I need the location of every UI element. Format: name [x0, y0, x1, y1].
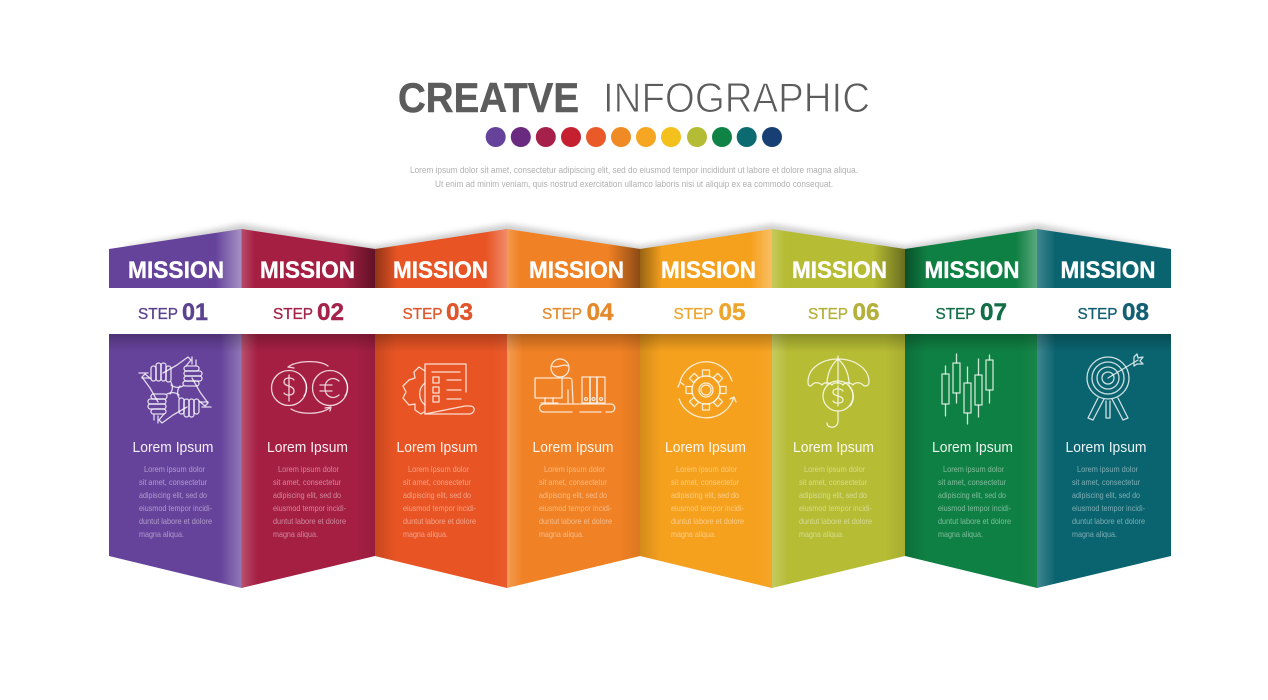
header band 8: MISSION [1060, 257, 1156, 284]
step label 1: STEP [138, 306, 178, 323]
panel: step 7 [905, 229, 1037, 588]
body text 1: eiusmod tempor incidi- [139, 503, 212, 513]
body text 8: magna aliqua. [1072, 529, 1117, 539]
body text 5: Lorem ipsum dolor [676, 464, 737, 474]
step label 8: 08 [1122, 299, 1149, 326]
body text 7: Lorem ipsum dolor [943, 464, 1004, 474]
step label 1 [138, 299, 208, 326]
icon: target with arrow on tripod [1087, 354, 1143, 420]
header band 3: MISSION [393, 257, 488, 284]
panel: step 4 [507, 229, 640, 588]
body panel 5 [640, 334, 772, 588]
step label 2: 02 [317, 299, 344, 326]
body panel 4 [507, 334, 640, 588]
title [398, 74, 870, 121]
body text 8: duntut labore et dolore [1072, 516, 1145, 526]
header band 4 [507, 229, 640, 288]
step label 3: STEP [402, 306, 442, 323]
body text 5 [671, 464, 744, 539]
heading 6: Lorem Ipsum [793, 440, 874, 456]
heading 4: Lorem Ipsum [532, 440, 614, 456]
body text 7: magna aliqua. [938, 529, 983, 539]
body text 2: magna aliqua. [273, 529, 318, 539]
step label 8: STEP [1078, 306, 1118, 323]
step label 2 [273, 299, 344, 326]
body text 8: sit amet, consectetur [1072, 477, 1140, 487]
step label 7: STEP [936, 306, 976, 323]
icon: candlestick chart [942, 354, 993, 424]
header band 3 [375, 229, 507, 288]
body text 8 [1072, 464, 1145, 539]
colour dots row [486, 127, 782, 147]
step label 6 [808, 299, 880, 326]
body text 5: sit amet, consectetur [671, 477, 739, 487]
body panel 8 [1037, 334, 1171, 588]
body text 4: sit amet, consectetur [539, 477, 607, 487]
body text 4: duntut labore et dolore [539, 516, 612, 526]
body text 6: sit amet, consectetur [799, 477, 867, 487]
body text 3: Lorem ipsum dolor [408, 464, 469, 474]
header band 5 [640, 229, 772, 288]
body text 1: magna aliqua. [139, 529, 184, 539]
step label 5: 05 [718, 299, 746, 326]
body text 5: eiusmod tempor incidi- [671, 503, 744, 513]
panel: step 2 [242, 229, 375, 588]
heading 2: Lorem Ipsum [267, 440, 348, 456]
body text 7: eiusmod tempor incidi- [938, 503, 1011, 513]
body text 5: adipiscing elit, sed do [671, 490, 739, 500]
step label 6: STEP [808, 306, 848, 323]
header band 6 [772, 229, 905, 288]
header band 5: MISSION [661, 257, 756, 284]
body text 3: adipiscing elit, sed do [403, 490, 471, 500]
body text 5: magna aliqua. [671, 529, 716, 539]
body text 1: adipiscing elit, sed do [139, 490, 207, 500]
title: INFOGRAPHIC [603, 74, 870, 121]
header band 4: MISSION [529, 257, 624, 284]
step label 4: 04 [586, 299, 614, 326]
body panel 1 [109, 334, 242, 588]
body text 6 [799, 464, 872, 539]
body text 4 [539, 464, 612, 539]
body text 3: magna aliqua. [403, 529, 448, 539]
step label 5 [674, 299, 746, 326]
body text 8: adipiscing elit, sed do [1072, 490, 1140, 500]
header band 6: MISSION [792, 257, 887, 284]
body text 3: eiusmod tempor incidi- [403, 503, 476, 513]
body text 5: duntut labore et dolore [671, 516, 744, 526]
icon: joined hands [139, 357, 211, 423]
body text 2: Lorem ipsum dolor [278, 464, 339, 474]
subtitle text [410, 165, 858, 190]
body text 7: sit amet, consectetur [938, 477, 1006, 487]
body panel 6 [772, 334, 905, 588]
body text 4: eiusmod tempor incidi- [539, 503, 612, 513]
header band 7: MISSION [924, 257, 1020, 284]
header band 1: MISSION [128, 257, 224, 284]
body text 4: adipiscing elit, sed do [539, 490, 607, 500]
body text 6: magna aliqua. [799, 529, 844, 539]
panel: step 8 [1037, 229, 1171, 588]
step label 5: STEP [674, 306, 714, 323]
step label 2: STEP [273, 306, 313, 323]
heading 5: Lorem Ipsum [665, 440, 746, 456]
panel: step 5 [640, 229, 772, 588]
body text 7: duntut labore et dolore [938, 516, 1011, 526]
body text 4: Lorem ipsum dolor [544, 464, 605, 474]
header band 2: MISSION [260, 257, 355, 284]
body text 7: adipiscing elit, sed do [938, 490, 1006, 500]
fold shadow above header [125, 224, 1160, 262]
step label 8 [1078, 299, 1149, 326]
header band 1 [109, 229, 242, 288]
body text 6: eiusmod tempor incidi- [799, 503, 872, 513]
icon: umbrella over coin [808, 356, 869, 427]
step label 7 [936, 299, 1007, 326]
body text 3: sit amet, consectetur [403, 477, 471, 487]
body panel 3 [375, 334, 507, 588]
body text 6: adipiscing elit, sed do [799, 490, 867, 500]
body text 1 [139, 464, 212, 539]
body text 4: magna aliqua. [539, 529, 584, 539]
panel: step 3 [375, 229, 507, 588]
heading 3: Lorem Ipsum [396, 440, 478, 456]
body text 7 [938, 464, 1011, 539]
step label 3: 03 [446, 299, 473, 326]
subtitle text: Lorem ipsum dolor sit amet, consectetur adipiscing elit, sed do eiusmod tempor incididunt ut labore et dolore magna aliqua. [410, 165, 858, 176]
body text 6: duntut labore et dolore [799, 516, 872, 526]
header band 8 [1037, 229, 1171, 288]
heading 1: Lorem Ipsum [132, 440, 214, 456]
subtitle text: Ut enim ad minim veniam, quis nostrud exercitation ullamco laboris nisi ut aliquip ex ea commodo consequat. [435, 179, 833, 190]
header band 2 [242, 229, 375, 288]
heading 7: Lorem Ipsum [932, 440, 1013, 456]
step label 6: 06 [852, 299, 880, 326]
step label 4: STEP [542, 306, 582, 323]
step label 4 [542, 299, 614, 326]
step label 1: 01 [182, 299, 208, 326]
icon: gear with cycle arrows [678, 362, 736, 418]
body text 1: duntut labore et dolore [139, 516, 212, 526]
icon: currency exchange coins [272, 362, 348, 413]
icon: gear with checklist [403, 364, 474, 414]
body text 3: duntut labore et dolore [403, 516, 476, 526]
heading 8: Lorem Ipsum [1066, 440, 1146, 456]
body text 6: Lorem ipsum dolor [804, 464, 865, 474]
body text 2: eiusmod tempor incidi- [273, 503, 346, 513]
body panel 2 [242, 334, 375, 588]
step label 7: 07 [980, 299, 1007, 326]
panel: step 6 [772, 229, 905, 588]
body text 1: Lorem ipsum dolor [144, 464, 205, 474]
header band 7 [905, 229, 1037, 288]
title: CREATVE [398, 74, 579, 121]
panel: step 1 [109, 229, 242, 588]
body text 2: sit amet, consectetur [273, 477, 341, 487]
step label 3 [402, 299, 473, 326]
body text 1: sit amet, consectetur [139, 477, 207, 487]
body text 2 [273, 464, 346, 539]
icon: person at desk with binders [535, 359, 615, 412]
body text 8: Lorem ipsum dolor [1077, 464, 1138, 474]
body text 3 [403, 464, 476, 539]
body text 2: duntut labore et dolore [273, 516, 346, 526]
body text 8: eiusmod tempor incidi- [1072, 503, 1145, 513]
body panel 7 [905, 334, 1037, 588]
body text 2: adipiscing elit, sed do [273, 490, 341, 500]
